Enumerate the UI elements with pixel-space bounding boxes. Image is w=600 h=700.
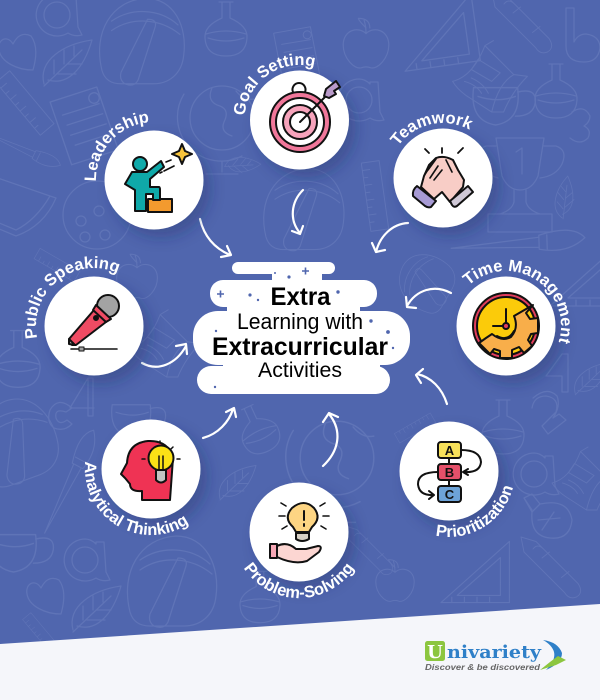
icon: A B C priority blocks	[418, 442, 481, 502]
logo tagline: Discover & be discovered	[425, 663, 541, 672]
node: leadership	[84, 112, 215, 242]
icon: A B C priority blocks: C	[445, 487, 455, 502]
icon: clasped hands	[413, 148, 473, 207]
label: Goal Setting	[178, 54, 315, 158]
icon: bulb over hand	[270, 503, 329, 562]
icon: A B C priority blocks: B	[445, 465, 454, 480]
icon: A B C priority blocks: A	[445, 443, 455, 458]
title text: Learning with	[237, 309, 363, 334]
node: goal setting	[178, 54, 360, 182]
logo bird	[540, 640, 566, 670]
footer band	[0, 604, 600, 700]
icon: clock and gear	[473, 293, 539, 359]
node: prioritization	[400, 422, 513, 537]
label: Teamwork	[389, 114, 473, 144]
icon: person pointing at star	[125, 144, 192, 212]
title text	[212, 283, 388, 382]
title text: Extra	[270, 283, 332, 311]
label: Analytical Thinking	[84, 462, 189, 536]
logo: Univariety	[425, 640, 566, 672]
central cloud with title	[193, 262, 410, 394]
arrow: public speaking to centre	[142, 344, 187, 367]
node: time management	[456, 260, 570, 388]
arrow: teamwork to centre	[372, 223, 408, 252]
arrow: leadership to centre	[200, 219, 231, 257]
icon: microphone	[69, 295, 119, 351]
label: Prioritization	[436, 486, 513, 537]
logo badge: U	[427, 642, 443, 663]
arrow: problem-solving to centre	[323, 413, 338, 466]
arrow: prioritization to centre	[416, 369, 447, 404]
arrow: goal setting to centre	[292, 190, 303, 234]
icon: head with light bulb	[121, 441, 180, 500]
label: Problem-Solving	[244, 562, 356, 598]
node: teamwork	[389, 114, 504, 240]
title text: Activities	[258, 359, 342, 382]
node: public speaking	[25, 256, 156, 388]
title text: Extracurricular	[212, 333, 388, 361]
label: Leadership	[84, 112, 148, 180]
label: Time Management	[462, 260, 570, 344]
arrow: time management to centre	[406, 289, 451, 308]
logo wordmark: nivariety	[447, 642, 542, 663]
node: analytical thinking	[84, 420, 212, 536]
label: Public Speaking	[25, 256, 120, 338]
node: problem-solving	[244, 482, 360, 598]
icon: target with arrow	[270, 81, 340, 152]
arrow: analytical thinking to centre	[203, 408, 236, 438]
